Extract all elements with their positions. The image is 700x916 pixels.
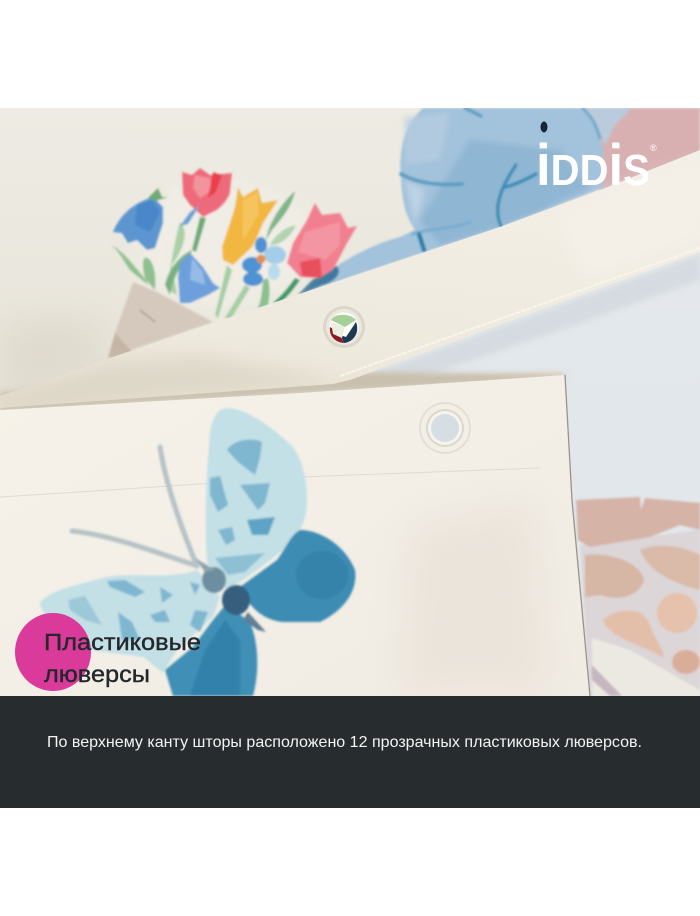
brand logo: iDDiS <box>536 133 650 198</box>
paper cone <box>115 282 212 350</box>
pink background wash <box>600 108 700 192</box>
title: plastic grommets: люверсы <box>44 661 150 687</box>
right fold edge <box>565 375 590 696</box>
blue bell flower lower <box>178 253 220 303</box>
left wing <box>40 570 220 673</box>
giraffe mane band <box>576 497 700 547</box>
white paper ground behind flowers <box>140 180 330 315</box>
wing spots <box>68 440 275 640</box>
red tulip <box>182 168 232 217</box>
pink tulip <box>287 203 357 278</box>
title: plastic grommets: Пластиковые <box>44 629 201 655</box>
yellow tulip <box>222 187 278 265</box>
upper curtain fabric background <box>0 108 700 428</box>
infographic canvas <box>0 108 700 808</box>
upper wing <box>206 408 307 590</box>
butterfly illustration <box>40 408 355 696</box>
right curtain layer, pale blue <box>377 252 700 696</box>
antennae <box>72 447 197 566</box>
giraffe neck base <box>580 530 700 696</box>
trunk shadow spot <box>298 266 339 295</box>
caption text: По верхнему канту шторы расположено 12 прозрачных пластиковых люверсов. <box>47 734 642 751</box>
blue bell flower left <box>113 197 163 250</box>
forget-me-not flower <box>242 237 286 286</box>
elephant ink lines <box>401 108 600 250</box>
dark right wing <box>240 530 355 622</box>
elephant eye <box>540 122 548 132</box>
flower bouquet illustration <box>108 168 357 358</box>
elephant body <box>297 108 604 296</box>
giraffe spots <box>585 554 644 598</box>
elephant illustration <box>297 108 700 296</box>
dark caption band <box>0 696 700 808</box>
bottom grommet <box>419 402 471 454</box>
hem stitch lines <box>0 468 540 497</box>
stems and leaves <box>111 191 300 320</box>
dark lower wing <box>165 603 257 696</box>
giraffe illustration <box>576 497 700 696</box>
hem edge stitching <box>340 248 700 376</box>
shadow strip behind lower layer <box>0 372 565 412</box>
top grommet <box>323 306 365 348</box>
bottom curtain hem panel <box>0 375 590 696</box>
pink accent circle <box>15 613 91 691</box>
brand logo: ® <box>650 143 657 153</box>
product photo: shower curtain detail <box>0 108 700 696</box>
shadow under top flap <box>388 258 700 372</box>
butterfly body <box>195 558 266 632</box>
top curtain hem flap <box>0 150 700 408</box>
